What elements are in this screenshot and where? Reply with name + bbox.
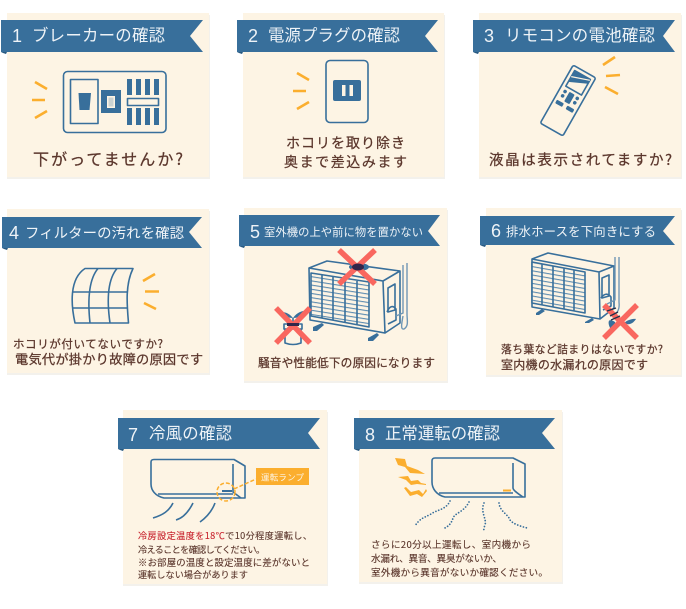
heading ribbon 3: リモコンの電池確認 <box>505 27 655 45</box>
caption 6 <box>501 342 663 373</box>
panel 1: breaker check <box>1 13 210 179</box>
caption 7: 冷えることを確認してください。 <box>138 542 265 556</box>
caption 2 <box>284 133 407 172</box>
panel 6: drain hose <box>480 208 682 377</box>
icon: remote control <box>540 65 596 136</box>
icon: cold wind <box>153 503 215 522</box>
icon: dotted air streams <box>415 501 527 532</box>
heading ribbon 5: 室外機の上や前に物を置かない <box>264 225 423 239</box>
caption 8 <box>371 537 548 579</box>
icon: red cross over blocked top <box>339 250 375 284</box>
panel 3: remote control battery check <box>473 13 682 179</box>
caption 7: 冷房設定温度を18℃で10分程度運転し、 <box>138 528 312 542</box>
heading ribbon 5: 5 <box>250 222 260 242</box>
heading ribbon 2 <box>237 20 438 54</box>
heading ribbon 7 <box>118 418 320 451</box>
panel 5: outdoor unit clearance <box>239 208 448 383</box>
panel 2: power plug check <box>237 13 445 179</box>
panel 8: normal operation check <box>354 410 563 584</box>
caption 8: 水漏れ、異音、異臭がないか、 <box>371 551 502 565</box>
heading ribbon 4: 4 <box>9 223 19 243</box>
caption 3: 液晶は表示されてますか? <box>489 149 672 170</box>
label: operation lamp: 運転ランプ <box>261 472 304 484</box>
heading ribbon 6: 6 <box>491 221 501 241</box>
icon: red cross over hose and leaves <box>604 305 637 338</box>
caption 4 <box>13 336 203 368</box>
icon: potted plant with red cross <box>276 308 310 344</box>
heading ribbon 1: ブレーカーの確認 <box>32 26 165 45</box>
icon: breaker box <box>64 72 166 132</box>
icon: orange rays 1 <box>32 82 47 118</box>
caption 2: ホコリを取り除き <box>286 133 405 153</box>
caption 8: さらに20分以上運転し、室内機から <box>371 537 531 551</box>
icon: indoor AC unit <box>432 458 525 497</box>
heading ribbon 8 <box>354 418 555 451</box>
heading ribbon 7: 7 <box>128 425 138 445</box>
heading ribbon 1: 1 <box>12 26 22 46</box>
heading ribbon 8: 正常運転の確認 <box>385 425 500 443</box>
heading ribbon 4: フィルターの汚れを確認 <box>25 225 185 242</box>
heading ribbon 2: 2 <box>248 26 258 46</box>
icon: orange rays 2 <box>293 73 309 109</box>
caption 4: 電気代が掛かり故障の原因です <box>15 349 203 368</box>
icon: air filter <box>72 268 133 323</box>
panel 4: filter check <box>2 209 210 375</box>
icon: orange rays 3 <box>603 57 620 94</box>
heading ribbon 5 <box>239 215 440 248</box>
icon: outdoor unit with drain hose <box>532 253 619 323</box>
caption 8: 室外機から異音がないか確認ください。 <box>371 565 548 579</box>
caption 1: 下がってませんか? <box>33 146 183 170</box>
icon: orange rays 4 <box>143 274 159 309</box>
heading ribbon 7: 冷風の確認 <box>149 425 232 443</box>
heading ribbon 8: 8 <box>365 425 375 445</box>
heading ribbon 3: 3 <box>484 26 494 46</box>
panel 7: cold air check <box>118 410 328 586</box>
heading ribbon 4 <box>2 217 202 250</box>
caption 2: 奥まで差込みます <box>284 152 407 172</box>
icon: outdoor unit <box>309 261 407 341</box>
heading ribbon 2: 電源プラグの確認 <box>268 27 400 45</box>
heading ribbon 6: 排水ホースを下向きにする <box>506 224 656 239</box>
icon: orange noise zigzags <box>395 458 427 497</box>
heading ribbon 1 <box>1 20 203 54</box>
caption 6: 室内機の水漏れの原因です <box>501 356 648 373</box>
caption 7: 運転しない場合があります <box>138 567 248 581</box>
caption 5: 騒音や性能低下の原因になります <box>258 354 435 371</box>
icon: wall outlet <box>326 60 368 122</box>
icon: indoor AC unit <box>151 460 245 498</box>
label: operation lamp <box>256 468 309 485</box>
caption 7: ※お部屋の温度と設定温度に差がないと <box>138 555 310 569</box>
caption 7 <box>138 528 312 581</box>
heading ribbon 3 <box>473 20 675 54</box>
caption 4: ホコリが付いてないですか? <box>13 336 163 352</box>
icon: dashed lamp callout <box>217 479 256 501</box>
heading ribbon 6 <box>480 216 675 247</box>
caption 6: 落ち葉など詰まりはないですか? <box>501 342 663 357</box>
